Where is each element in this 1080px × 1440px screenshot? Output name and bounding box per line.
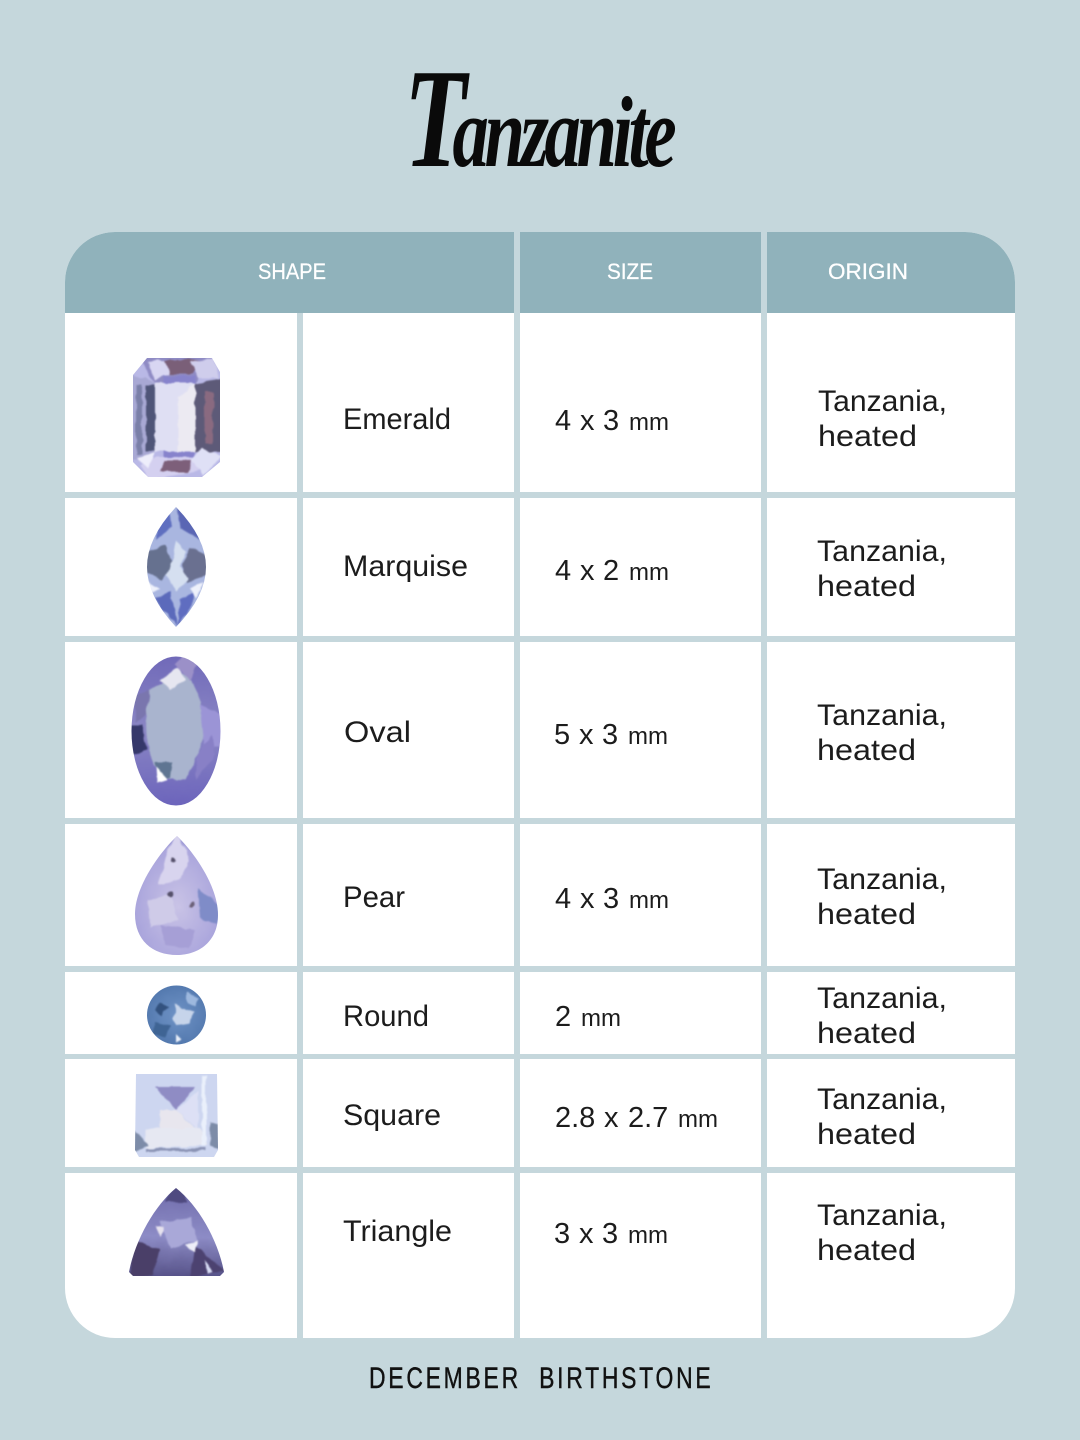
size: 3 x 3 mm: mm: [628, 1222, 668, 1249]
origin: tanzania heated: Tanzania,: [817, 863, 947, 896]
icon: oval cut gem: [132, 656, 220, 806]
size: 2.8 x 2.7 mm: 2.8: [555, 1102, 595, 1134]
size: 4 x 3 mm: mm: [629, 887, 669, 914]
size: 4 x 2 mm: mm: [629, 559, 669, 586]
icon: pear cut gem: [135, 836, 218, 955]
icon: square cut gem: [135, 1074, 218, 1157]
size: 4 x 3 mm: 3: [603, 883, 619, 915]
label: round: Round: [343, 1000, 429, 1033]
size: 4 x 3 mm: x: [580, 405, 595, 437]
size: 2.8 x 2.7 mm: 2.7: [628, 1102, 668, 1134]
column headings: [258, 259, 908, 284]
table card: [65, 232, 1015, 1338]
row: triangle: [129, 1188, 944, 1276]
row: square: [135, 1074, 944, 1157]
row: round: [147, 986, 944, 1044]
label: oval: Oval: [344, 716, 411, 749]
heading: size: SIZE: [607, 259, 653, 284]
title: Tanzanite: [404, 40, 676, 197]
row: marquise: heated: [817, 570, 916, 603]
origin: tanzania heated: Tanzania,: [818, 385, 947, 418]
label: emerald: Emerald: [343, 403, 451, 436]
row: oval: heated: [817, 734, 916, 767]
row: pear: [130, 830, 947, 960]
size: 4 x 3 mm: 4: [555, 405, 571, 437]
size: 5 x 3 mm: mm: [628, 723, 668, 750]
row: square: heated: [817, 1118, 916, 1151]
label: triangle: Triangle: [343, 1215, 452, 1248]
size: 4 x 2 mm: 2: [603, 555, 619, 587]
size: 2.8 x 2.7 mm: x: [604, 1102, 619, 1134]
size: 3 x 3 mm: 3: [602, 1218, 618, 1250]
origin: tanzania heated: Tanzania,: [817, 1199, 947, 1232]
size: 3 x 3 mm: x: [579, 1218, 594, 1250]
heading: origin: ORIGIN: [828, 259, 908, 284]
row: triangle: heated: [817, 1234, 916, 1267]
label: square: Square: [343, 1099, 441, 1132]
size: 4 x 3 mm: 4: [555, 883, 571, 915]
size: 3 x 3 mm: 3: [554, 1218, 570, 1250]
row: marquise: [147, 507, 944, 627]
size: 5 x 3 mm: 3: [602, 719, 618, 751]
size: 4 x 2 mm: x: [580, 555, 595, 587]
icon: emerald cut gem: [133, 358, 220, 477]
panel: table: [65, 232, 1015, 1338]
size: 2 mm: mm: [581, 1005, 621, 1032]
size: 4 x 3 mm: x: [580, 883, 595, 915]
row: emerald: heated: [818, 420, 917, 453]
origin: tanzania heated: Tanzania,: [817, 699, 947, 732]
row: round: heated: [817, 1017, 916, 1050]
label: pear: Pear: [343, 881, 405, 914]
footer caption: DECEMBER BIRTHSTONE: [369, 1361, 711, 1395]
size: 4 x 3 mm: 3: [603, 405, 619, 437]
origin: tanzania heated: Tanzania,: [817, 535, 947, 568]
table header band: [65, 232, 1015, 313]
icon: marquise cut gem: [147, 507, 206, 627]
row: emerald: [133, 358, 944, 477]
size: 5 x 3 mm: 5: [554, 719, 570, 751]
row: oval: [125, 650, 947, 810]
size: 2.8 x 2.7 mm: mm: [678, 1106, 718, 1133]
size: 2 mm: 2: [555, 1001, 571, 1033]
label: marquise: Marquise: [343, 550, 468, 583]
size: 4 x 2 mm: 4: [555, 555, 571, 587]
size: 5 x 3 mm: x: [579, 719, 594, 751]
icon: round cut gem: [147, 986, 206, 1044]
row: pear: heated: [817, 898, 916, 931]
origin: tanzania heated: Tanzania,: [817, 1083, 947, 1116]
heading: shape: SHAPE: [258, 259, 326, 284]
icon: trillion cut gem: [129, 1188, 224, 1276]
origin: tanzania heated: Tanzania,: [817, 982, 947, 1015]
size: 4 x 3 mm: mm: [629, 409, 669, 436]
